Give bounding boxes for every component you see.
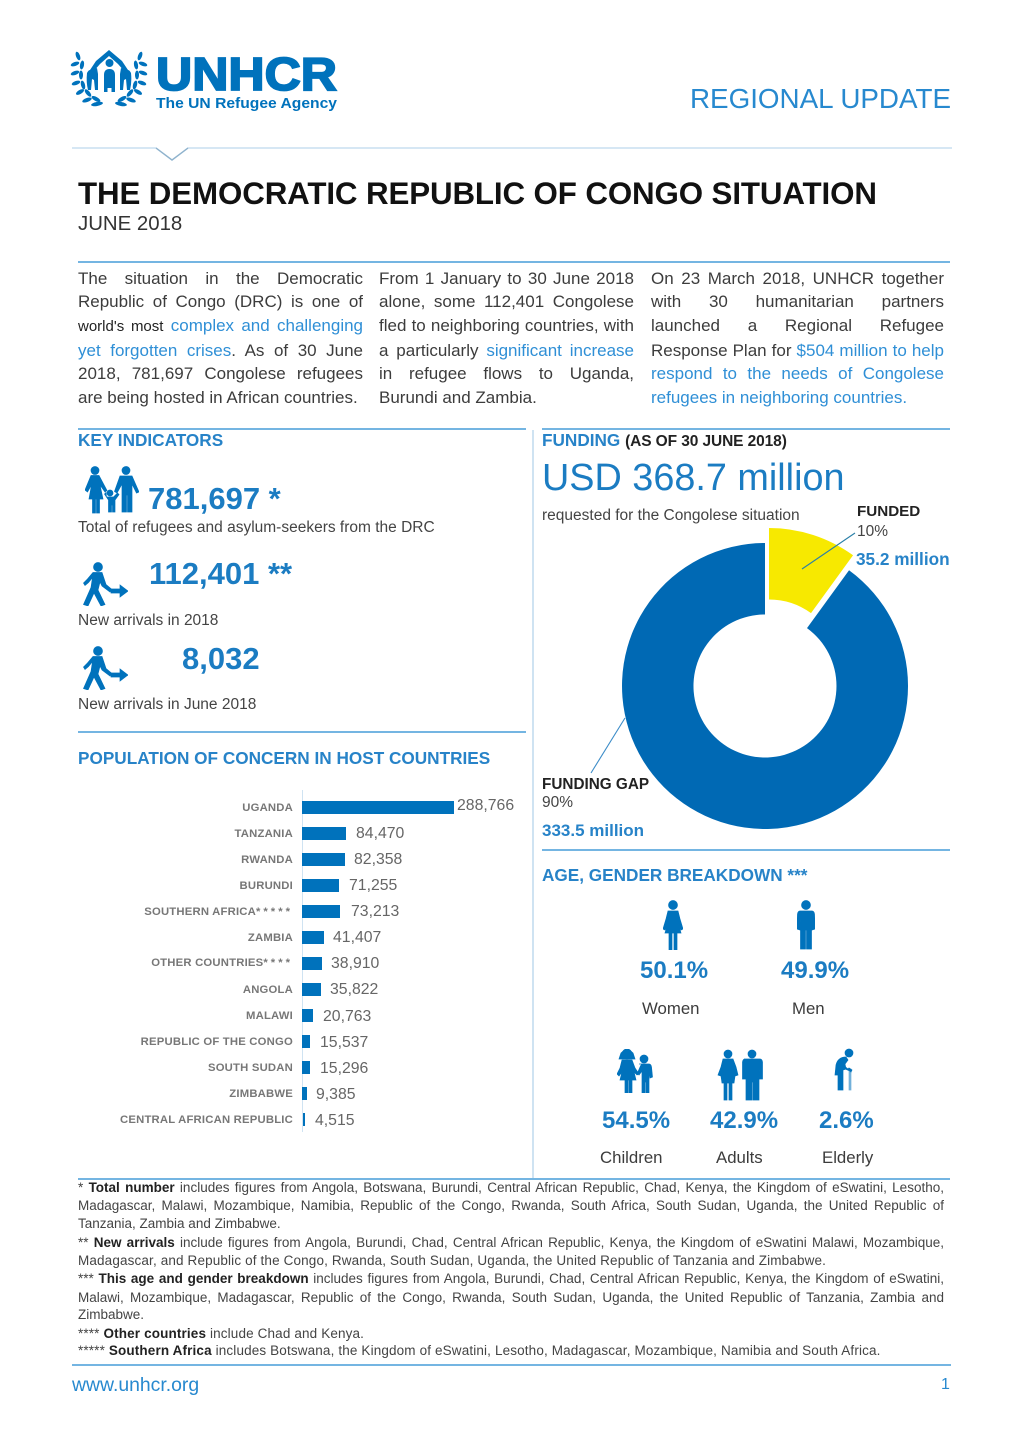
intro column 2 — [379, 269, 634, 407]
intro column 1: 2018, 781,697 Congolese refugees — [78, 364, 363, 383]
bar chart: population by host country: SOUTHERN AFRICA***** — [144, 906, 293, 918]
bar chart: population by host country — [120, 790, 514, 1132]
intro column 2: Burundi and Zambia. — [379, 388, 537, 407]
intro column 3: On 23 March 2018, UNHCR together — [651, 269, 944, 288]
wordmark: The UN Refugee Agency — [156, 96, 337, 112]
caption: requested: requested for the Congolese situation — [542, 507, 800, 524]
caption: new arrivals june: New arrivals in June 2018 — [78, 696, 256, 713]
icon: woman — [663, 900, 683, 950]
footnotes: Malawi, Mozambique, Madagascar, Republic of the Congo, Rwanda, South Sudan, Uganda, the United Republic of Tanzania, Zambia and — [78, 1290, 944, 1305]
bar chart: population by host country: TANZANIA — [234, 828, 293, 840]
footnotes: ** New arrivals include figures from Angola, Burundi, Chad, Central African Republic, Kenya, the Kingdom of eSwatini Malawi, Mozambique, — [78, 1235, 944, 1250]
bar chart: population by host country: 35,822 — [330, 981, 378, 998]
icon: walking arrow — [83, 562, 128, 606]
label: funding gap — [542, 776, 649, 840]
bar chart: population by host country: ZAMBIA — [248, 932, 293, 944]
label: adults: Adults — [716, 1148, 763, 1167]
intro column 1: The situation in the Democratic — [78, 269, 363, 288]
icon: UNHCR emblem — [70, 50, 148, 107]
icon: walking arrow june — [83, 646, 128, 690]
bar chart: population by host country: 73,213 — [351, 903, 399, 920]
bar chart: population by host country: 41,407 — [333, 929, 381, 946]
bar chart: population by host country: 84,470 — [356, 825, 404, 842]
intro column 3 — [651, 269, 944, 407]
bar chart: population by host country: BURUNDI — [240, 880, 293, 892]
footnotes: Madagascar, and Republic of the Congo, Rwanda, South Sudan, Uganda, the United Republic of Tanzania and Zimbabwe. — [78, 1253, 826, 1268]
label: funded: FUNDED — [857, 503, 920, 520]
footnotes: Tanzania, Zambia and Zimbabwe. — [78, 1216, 281, 1231]
bar chart: population by host country: 288,766 — [457, 797, 514, 814]
bar chart: population by host country: 9,385 — [316, 1086, 356, 1103]
bar chart: population by host country: 4,515 — [315, 1112, 355, 1129]
bar chart: population by host country: ANGOLA — [243, 984, 293, 996]
label: funding gap: 333.5 million — [542, 821, 644, 840]
bar chart: population by host country: 15,296 — [320, 1060, 368, 1077]
bar chart: population by host country: 82,358 — [354, 851, 402, 868]
header rule with chevron — [72, 147, 952, 161]
label: men: Men — [792, 999, 825, 1018]
heading: funding: FUNDING (AS OF 30 JUNE 2018) — [542, 430, 787, 450]
intro column 1: are being hosted in African countries. — [78, 388, 358, 407]
figure: children: 54.5% — [602, 1107, 670, 1134]
footer url: www.unhcr.org — [72, 1374, 199, 1396]
bar chart: population by host country: 38,910 — [331, 955, 379, 972]
bar chart: population by host country: 15,537 — [320, 1034, 368, 1051]
bar chart: population by host country: MALAWI — [246, 1010, 293, 1022]
bar chart: population by host country: CENTRAL AFRICAN REPUBLIC — [120, 1114, 293, 1126]
icon: children — [617, 1049, 653, 1093]
intro column 2: fled to neighboring countries, with — [379, 316, 634, 335]
donut chart — [590, 528, 908, 829]
figure: women: 50.1% — [640, 957, 708, 984]
intro column 2: From 1 January to 30 June 2018 — [379, 269, 634, 288]
intro column 2: a particularly significant increase — [379, 341, 634, 360]
panel: key indicators — [78, 430, 435, 713]
figure: new arrivals june: 8,032 — [182, 641, 260, 676]
heading: population of concern: POPULATION OF CONCERN IN HOST COUNTRIES — [78, 748, 490, 768]
figure: new arrivals 2018: 112,401 ** — [149, 556, 292, 591]
bar chart: population by host country: 71,255 — [349, 877, 397, 894]
intro column 2: in refugee flows to Uganda, — [379, 364, 634, 383]
figure: elderly: 2.6% — [819, 1107, 874, 1134]
label: elderly: Elderly — [822, 1148, 873, 1167]
bar chart: population by host country: ZIMBABWE — [229, 1088, 293, 1100]
caption: total refugees: Total of refugees and asylum-seekers from the DRC — [78, 519, 435, 536]
intro column 3: Response Plan for $504 million to help — [651, 341, 944, 360]
icon: adults — [718, 1050, 763, 1100]
heading: age gender: AGE, GENDER BREAKDOWN *** — [542, 865, 807, 885]
icon: family — [85, 466, 139, 514]
title: THE DEMOCRATIC REPUBLIC OF CONGO SITUATION — [78, 176, 877, 211]
figure: total refugees: 781,697 * — [148, 481, 281, 516]
footnotes — [78, 1180, 944, 1358]
label: children: Children — [600, 1148, 662, 1167]
heading: key indicators: KEY INDICATORS — [78, 430, 223, 450]
panel: funding — [542, 430, 950, 840]
icon: man — [797, 900, 815, 950]
bar chart: population by host country: SOUTH SUDAN — [208, 1062, 293, 1074]
label: funded: 35.2 million — [856, 549, 950, 569]
label: funding gap: FUNDING GAP — [542, 776, 649, 793]
page number: 1 — [941, 1376, 950, 1393]
bar chart: population by host country: 20,763 — [323, 1008, 371, 1025]
footnotes: * Total number includes figures from Angola, Botswana, Burundi, Central African Republic, Chad, Kenya, the Kingdom of eSwatini, Lesotho, — [78, 1180, 944, 1195]
footnotes: Madagascar, Malawi, Mozambique, Namibia, Republic of the Congo, Rwanda, South Africa, South Sudan, Uganda, the United Republic of — [78, 1198, 944, 1213]
caption: new arrivals 2018: New arrivals in 2018 — [78, 612, 218, 629]
icon: elderly — [834, 1048, 854, 1090]
intro column 3: refugees in neighboring countries. — [651, 388, 907, 407]
footnotes: **** Other countries include Chad and Kenya. — [78, 1326, 364, 1341]
intro column 1: world's most complex and challenging — [78, 316, 363, 335]
bar chart: population by host country: UGANDA — [242, 802, 293, 814]
figure: men: 49.9% — [781, 957, 849, 984]
bar chart: population by host country: REPUBLIC OF THE CONGO — [141, 1036, 293, 1048]
date: JUNE 2018 — [78, 213, 182, 235]
label: women: Women — [642, 999, 700, 1018]
label: funded — [856, 503, 950, 569]
bar chart: population by host country: RWANDA — [241, 854, 293, 866]
footnotes: ***** Southern Africa includes Botswana, the Kingdom of eSwatini, Lesotho, Madagascar, Mozambique, Namibia and South Africa. — [78, 1343, 881, 1358]
intro column 1: yet forgotten crises. As of 30 June — [78, 341, 363, 360]
intro column 3: with 30 humanitarian partners — [651, 292, 944, 311]
bar chart: population by host country: OTHER COUNTRIES**** — [151, 957, 293, 969]
wordmark: UNHCR — [156, 48, 337, 100]
intro column 1 — [78, 269, 363, 407]
figure: total requested: USD 368.7 million — [542, 457, 845, 499]
header tag: regional update: REGIONAL UPDATE — [690, 83, 951, 114]
label: funded: 10% — [857, 523, 888, 540]
panel: age and gender breakdown — [542, 865, 874, 1167]
footnotes: *** This age and gender breakdown includes figures from Angola, Burundi, Chad, Central African Republic, Kenya, the Kingdom of eSwatini, — [78, 1271, 944, 1286]
figure: adults: 42.9% — [710, 1107, 778, 1134]
intro column 3: respond to the needs of Congolese — [651, 364, 944, 383]
intro column 2: alone, some 112,401 Congolese — [379, 292, 634, 311]
UNHCR logo — [70, 48, 338, 112]
label: funding gap: 90% — [542, 794, 573, 811]
intro column 3: launched a Regional Refugee — [651, 316, 944, 335]
footnotes: Zimbabwe. — [78, 1307, 144, 1322]
